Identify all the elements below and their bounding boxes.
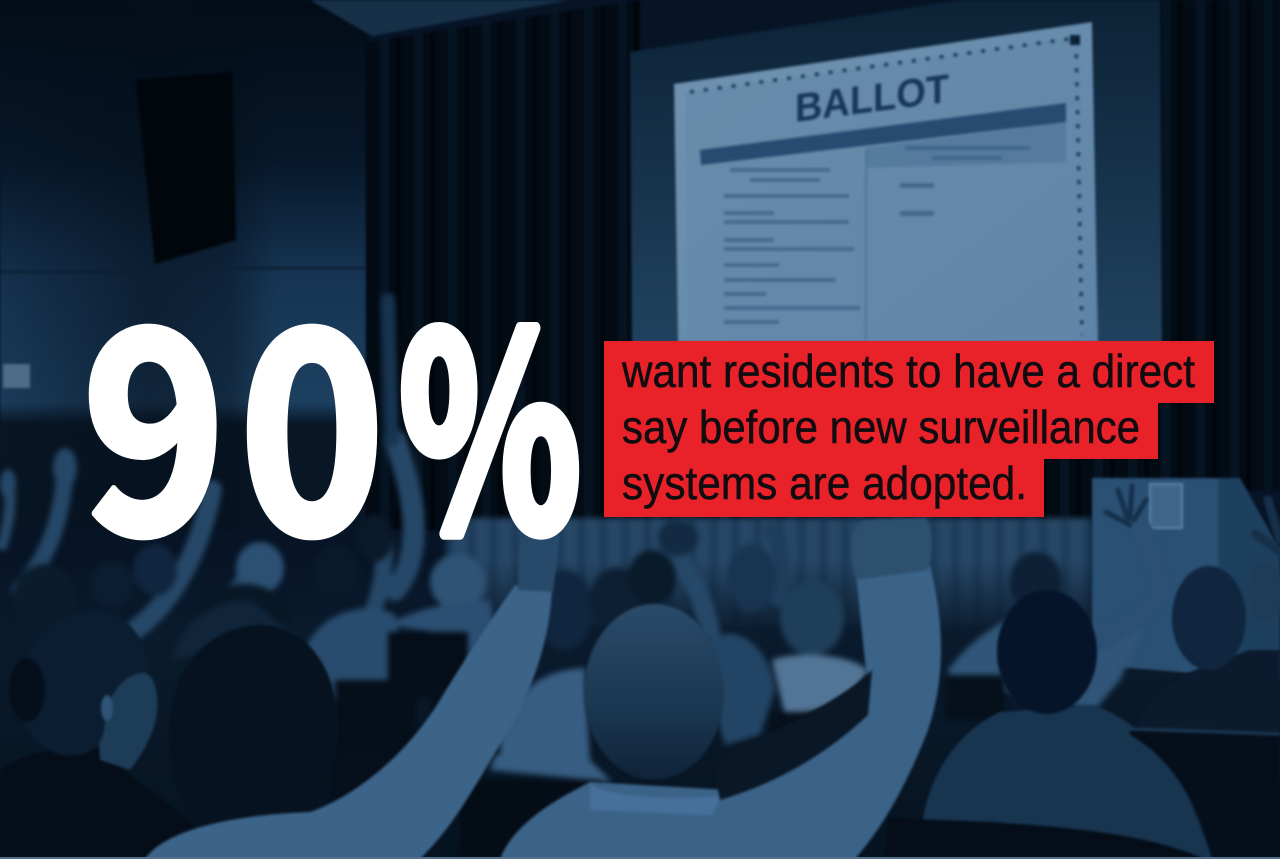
- lower stage curtain: [630, 340, 1160, 530]
- floor shadow: [0, 560, 1280, 859]
- woman at far left: [0, 610, 195, 859]
- left wall: [0, 0, 368, 530]
- seated man, right: [920, 590, 1212, 859]
- seated man, far right: [1135, 566, 1280, 745]
- raised arm and hand near podium: [1102, 486, 1280, 640]
- big statistic: [82, 208, 581, 614]
- center raised hand: [851, 518, 932, 580]
- screen surround: [630, 0, 1162, 345]
- callout background: [604, 341, 1214, 517]
- chairs: [1130, 728, 1280, 859]
- ballot left column lines: [724, 168, 860, 324]
- big statistic: 9: [82, 208, 226, 614]
- callout text: [621, 345, 1195, 509]
- heads: [13, 564, 77, 636]
- woman with bob hair: [169, 625, 338, 825]
- loudspeaker: [136, 72, 236, 264]
- raised arms, left crowd: [2, 300, 783, 670]
- raised sleeve arm: [145, 585, 552, 859]
- ballot header shading: [866, 122, 1066, 168]
- callout: red highlighted text: [604, 341, 1214, 517]
- callout text: say before new surveillance: [622, 401, 1140, 453]
- seat backs: [388, 632, 468, 697]
- raised hand: [518, 535, 560, 592]
- ballot dotted border: [690, 38, 1082, 335]
- bottom edge line: [0, 857, 1280, 859]
- ballot bar: [700, 103, 1066, 165]
- hands: [53, 448, 77, 488]
- bodies: [305, 608, 410, 700]
- big statistic: 0: [239, 208, 385, 614]
- stage curtain: [366, 0, 640, 530]
- ballot heading: BALLOT: [795, 66, 949, 131]
- callout text: systems are adopted.: [622, 457, 1027, 509]
- foreground audience: [0, 518, 1280, 859]
- big statistic: %: [399, 220, 581, 608]
- ballot right column lines: [900, 146, 1030, 216]
- podium: [1092, 478, 1280, 680]
- dark sleeve behind center man: [712, 670, 872, 800]
- background audience: [0, 300, 1280, 859]
- callout text: want residents to have a direct: [621, 345, 1195, 397]
- ballot column divider: [865, 150, 867, 340]
- projection screen: ballot: [674, 22, 1098, 342]
- man in center: [500, 518, 941, 859]
- right curtain: [1160, 0, 1280, 490]
- stage skirt: [446, 518, 1092, 628]
- ceiling panel: [310, 0, 570, 36]
